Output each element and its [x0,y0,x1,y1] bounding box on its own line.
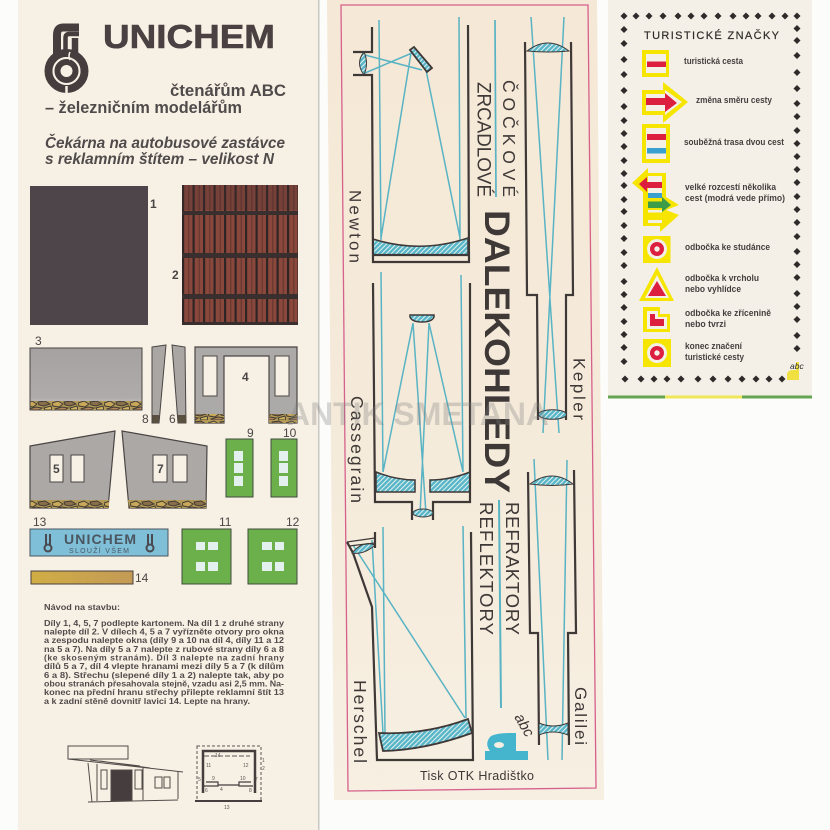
label: Newton: Newton [346,190,364,263]
part 4: front wall with door opening [195,347,297,423]
sign: peak [639,267,674,301]
label: Kepler: Kepler [570,358,588,420]
part 7: side wall: 7 [157,462,164,476]
text block: build instructions: a k zadní stěně dovnitř lavici 14. Lepte na hrany. [44,696,250,706]
label: peak [685,273,759,294]
illustration: floor plan: 12 [243,763,249,769]
diagram: Kepler telescope [525,17,573,433]
label: ruin [685,308,771,329]
label: end of marking: turistické cesty [685,352,744,362]
part 2: wooden roof [172,185,298,325]
illustration: floor plan: 14 [215,753,221,759]
subheading: model title: s reklamním štítem – velikost N [45,151,275,168]
part 9: green window [226,426,254,497]
text block: build instructions [44,602,284,706]
part 4: front wall with door opening: 4 [242,370,249,384]
sign: end of marking [643,339,671,367]
logo: abc: abc [511,710,538,740]
text block: build instructions: konec na přední hranu střechy přilepte reklamní štít 13 [44,687,284,697]
heading: reflectors: REFLEKTORY [476,502,497,635]
part 2: wooden roof: 2 [172,268,179,282]
illustration: floor plan: 11 [206,763,211,769]
part 8: wedge: 8 [142,412,149,426]
illustration: floor plan: 5 [198,777,201,783]
text block: build instructions: nalepte díl 2. V dílech 4, 5 a 7 vyřízněte otvory pro okna [44,626,284,636]
part 6: wedge: 6 [169,412,176,426]
part 3: back wall [30,334,142,410]
heading: refractors: REFRAKTORY [502,502,523,635]
heading: TURISTICKÉ ZNAČKY: TURISTICKÉ ZNAČKY [644,29,780,42]
diagram: Galilei telescope [528,459,576,760]
subheading: readers: čtenářům ABC [170,82,286,100]
sign: big junction [632,168,679,232]
frame: diamond border [620,12,800,382]
part 7: side wall [122,431,207,508]
part 14: bench [31,571,149,585]
text block: build instructions: a zespodu nalepte okna (díly 9 a 10 na díl 4, díly 11 a 12 [44,635,284,645]
part 10: green window [271,426,297,497]
illustration: floor plan: 13 [224,805,230,811]
part 1: dark roof underside [30,186,157,325]
diagram: Cassegrain telescope [373,272,470,520]
label: Galilei: Galilei [571,687,590,745]
illustration: floor plan: 10 [240,776,246,782]
label: big junction [685,182,785,203]
illustration: assembled bus shelter [68,746,183,802]
text block: build instructions: obou stranách přesahovala stejně, vzadu asi 2,5 mm. Na- [44,678,284,688]
watermark: ANTIK SMETANA [287,396,549,432]
text block: build instructions: (ke skoseným stranám). Díl 3 nalepte na zadní hrany [44,652,284,662]
text block: build instructions: Návod na stavbu: [44,602,120,612]
label: end of marking: konec značení [685,341,743,351]
part 13: advertising sign: 13 [33,515,47,529]
illustration: floor plan: 7 [255,777,258,783]
label: peak: odbočka k vrcholu [685,273,759,283]
part 12: green window: 12 [286,515,300,529]
part 5: side wall: 5 [53,462,60,476]
sign: ruin [643,307,670,332]
label: ruin: nebo tvrzi [685,319,726,329]
subheading: model title [45,134,285,168]
label: tourist path: turistická cesta [684,56,743,66]
part 5: side wall [30,431,115,508]
part 14: bench: 14 [135,571,149,585]
illustration: floor plan [195,746,265,811]
panel: tourist signs card [608,0,812,398]
illustration: floor plan: 2 [262,766,265,772]
heading: UNICHEM: UNICHEM [103,18,275,55]
divider line: lower blue [499,500,501,708]
frame: pink border [341,5,596,791]
label: peak: nebo vyhlídce [685,284,741,294]
panel: telescopes card [327,0,604,800]
heading: DALEKOHLEDY: DALEKOHLEDY [477,210,516,493]
part 13: advertising sign: SLOUŽÍ VŠEM [69,546,129,555]
heading: lens telescopes: ČOČKOVÉ [499,80,520,197]
part 13: advertising sign: UNICHEM [64,531,136,547]
logo: abc [485,710,538,760]
illustration: floor plan: 1 [262,758,265,764]
sign: tourist path [642,50,669,77]
part 1: dark roof underside: 1 [150,197,157,211]
part 11: green window: 11 [219,515,232,529]
part 10: green window: 10 [283,426,297,440]
sign: spring [643,236,670,263]
part 11: green window [182,515,232,584]
part 6: wedge [169,345,186,426]
subheading: readers: – železničním modelářům [45,99,242,117]
label: big junction: cest (modrá vede přímo) [685,193,785,203]
illustration: floor plan: 8 [249,788,252,794]
logo: small abc: abc [790,361,804,371]
logo: small abc [787,361,804,380]
text block: build instructions: dílů 5 a 7, díl 4 vlepte hranami mezi díly 5 a 7 (k dílům [44,661,284,671]
sign: direction change [642,82,688,123]
illustration: floor plan: 4 [220,787,223,793]
text: printer credit: Tisk OTK Hradištko [420,769,534,783]
part 13: advertising sign [30,515,168,556]
text block: build instructions: Díly 1, 4, 5, 7 podlepte kartonem. Na díl 1 z druhé strany [44,618,284,628]
part 3: back wall: 3 [35,334,42,348]
label: end of marking [685,341,744,362]
part 9: green window: 9 [247,426,254,440]
diagram: Herschel telescope [347,526,473,760]
label: Herschel: Herschel [350,680,370,763]
text block: build instructions: na 5 a 7). Na díly 5 a 7 nalepte z rubové strany díly 6 a 8 [44,644,284,654]
sign: parallel routes [642,124,670,163]
part 8: wedge [142,345,166,426]
subheading: model title: Čekárna na autobusové zastávce [45,134,285,152]
label: big junction: velké rozcestí několika [685,182,776,192]
heading: mirror telescopes: ZRCADLOVÉ [472,82,494,197]
logo: UNICHEM emblem [48,28,84,93]
diagram: Newton telescope [353,17,469,262]
label: parallel routes: souběžná trasa dvou cest [684,137,784,147]
label: spring: odbočka ke studánce [685,242,770,252]
divider line: upper blue [495,20,496,197]
label: ruin: odbočka ke zřícenině [685,308,771,318]
label: direction change: změna směru cesty [696,95,772,105]
label: Cassegrain: Cassegrain [347,396,367,503]
stripe: bottom colour band [608,396,812,398]
illustration: floor plan: 9 [212,776,215,782]
illustration: floor plan: 6 [205,788,208,794]
subheading: readers [45,82,286,117]
text block: build instructions: 6 a 8). Střechu (slepené díly 1 a 2) nalepte tak, aby po [44,670,284,680]
panel: UNICHEM model sheet [18,0,320,830]
part 12: green window [248,515,300,584]
